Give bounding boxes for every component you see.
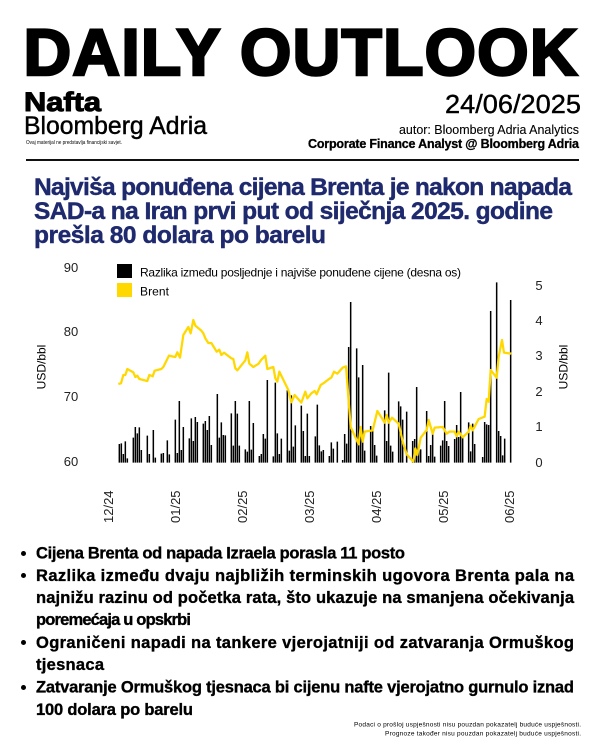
right axis title: USD/bbl (556, 345, 570, 389)
right axis labels: 1 (535, 419, 543, 434)
footer disclaimer: Podaci o prošloj uspješnosti nisu pouzdan pokazatelj buduće uspješnosti. (354, 722, 581, 728)
bullet 2: Razlika između dvaju najbližih terminskih ugovora Brenta pala na (36, 567, 575, 585)
x axis date labels: 01/25 (168, 490, 183, 523)
right axis labels: 0 (535, 455, 543, 470)
legend (117, 264, 461, 298)
headline (34, 174, 572, 249)
bullet 4 (21, 678, 574, 719)
x axis date labels: 05/25 (436, 490, 451, 523)
x axis date labels (101, 490, 517, 523)
headline: SAD-a na Iran prvi put od siječnja 2025. godine (34, 198, 553, 225)
x axis date labels: 03/25 (302, 490, 317, 523)
legend: spread (117, 264, 132, 278)
bullet 2: poremećaja u opskrbi (36, 611, 191, 629)
bars: spread between last and highest bid (119, 282, 511, 463)
left axis labels: 70 (64, 389, 78, 404)
topic: Nafta: Nafta (24, 87, 102, 117)
subtitle block: topic and publisher (24, 87, 207, 146)
left axis labels: 90 (64, 260, 78, 275)
bullet list (21, 544, 575, 719)
left axis title: USD/bbl (34, 345, 48, 389)
publisher: Bloomberg Adria: Bloomberg Adria (24, 112, 207, 140)
date: 24/06/2025 (445, 89, 581, 119)
bullet 3 (21, 634, 574, 674)
x axis date labels: 12/24 (101, 490, 116, 523)
legend: Razlika između posljednje i najviše ponuđene cijene (desna os) (140, 266, 461, 280)
right axis labels: 5 (535, 278, 543, 293)
line: Brent price (118, 320, 511, 462)
legend: Brent (117, 283, 132, 297)
bullet 3: tjesnaca (36, 656, 105, 674)
bullet 4: Zatvaranje Ormuškog tjesnaca bi cijenu nafte vjerojatno gurnulo iznad (36, 678, 574, 696)
bullet 4: 100 dolara po barelu (36, 701, 193, 719)
left axis labels: 60 (64, 454, 78, 469)
bullet 2 (21, 567, 575, 629)
author: autor: Bloomberg Adria Analytics (399, 123, 579, 137)
right axis labels (535, 278, 543, 470)
date and author block (308, 89, 581, 151)
disclaimer small: Ovaj materijal ne predstavlja financijski savjet. (26, 140, 122, 146)
right axis labels: 4 (535, 313, 543, 328)
headline: Najviša ponuđena cijena Brenta je nakon napada (34, 174, 572, 201)
author role: Corporate Finance Analyst @ Bloomberg Adria (308, 137, 580, 151)
headline: prešla 80 dolara po barelu (34, 222, 326, 249)
bullet 1: Cijena Brenta od napada Izraela porasla 11 posto (36, 544, 405, 562)
title: DAILY OUTLOOK (24, 15, 578, 89)
bullet 2: najnižu razinu od početka rata, što ukazuje na smanjena očekivanja (36, 589, 575, 607)
footer disclaimer (354, 722, 581, 738)
footer disclaimer: Prognoze također nisu pouzdan pokazatelj buduće uspješnosti. (385, 730, 581, 738)
left axis labels (64, 260, 78, 469)
x axis date labels: 02/25 (235, 490, 250, 523)
legend: Brent (140, 284, 170, 298)
x axis date labels: 06/25 (502, 490, 517, 523)
right axis labels: 3 (535, 348, 543, 363)
combo chart: Brent price and bid spread (34, 260, 570, 523)
left axis labels: 80 (64, 324, 78, 339)
x axis date labels: 04/25 (369, 490, 384, 523)
bullet 3: Ograničeni napadi na tankere vjerojatniji od zatvaranja Ormuškog (36, 634, 574, 652)
right axis labels: 2 (535, 384, 543, 399)
